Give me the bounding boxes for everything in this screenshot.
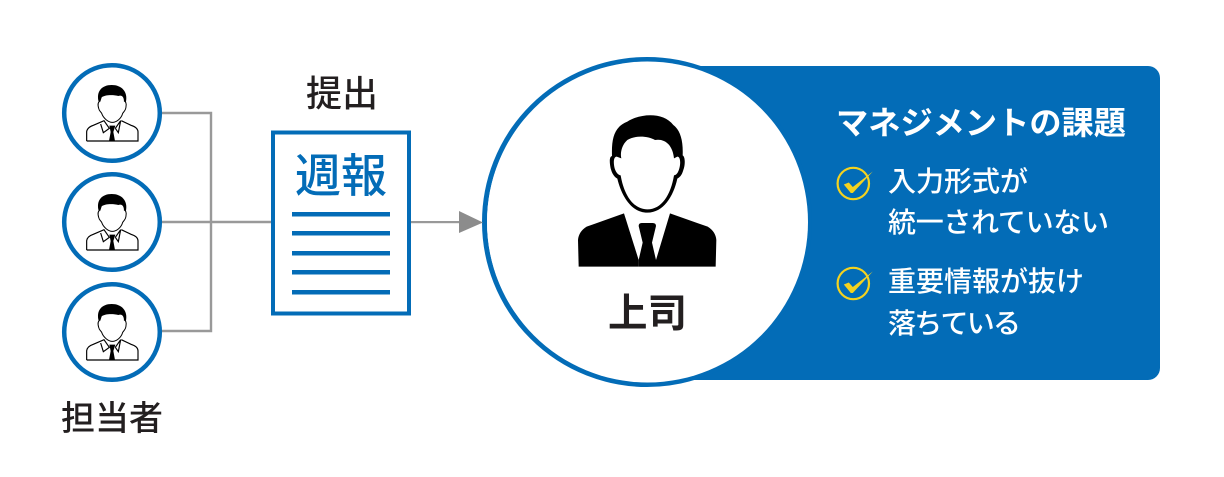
staff label: 担当者 [61, 400, 163, 438]
staff member 3 [64, 284, 160, 380]
manager label: 上司 [608, 292, 687, 336]
issue 2 text [888, 266, 1084, 339]
connector lines from staff to report [162, 113, 272, 331]
icon: person [87, 85, 138, 141]
icon: person [87, 304, 138, 360]
report title: 週報 [295, 150, 387, 202]
issue 2 text: 重要情報が抜け [888, 266, 1084, 297]
panel: management issues [660, 66, 1160, 380]
issue 2 text: 落ちている [888, 308, 1021, 339]
staff member 1 [64, 65, 160, 161]
staff member 2 [64, 174, 160, 270]
panel title: マネジメントの課題 [836, 105, 1126, 141]
issue 1 text: 入力形式が [888, 166, 1028, 197]
icon: person [87, 194, 138, 250]
issue 1 text [888, 166, 1109, 238]
arrow: report to manager [411, 211, 483, 233]
icon: check 2 [838, 268, 873, 299]
icon: check 1 [838, 168, 873, 199]
manager circle [484, 60, 810, 384]
icon: manager [578, 115, 716, 267]
submit label: 提出 [306, 73, 378, 114]
issue 1 text: 統一されていない [888, 207, 1109, 238]
report document [273, 132, 409, 314]
report text lines [292, 212, 390, 294]
